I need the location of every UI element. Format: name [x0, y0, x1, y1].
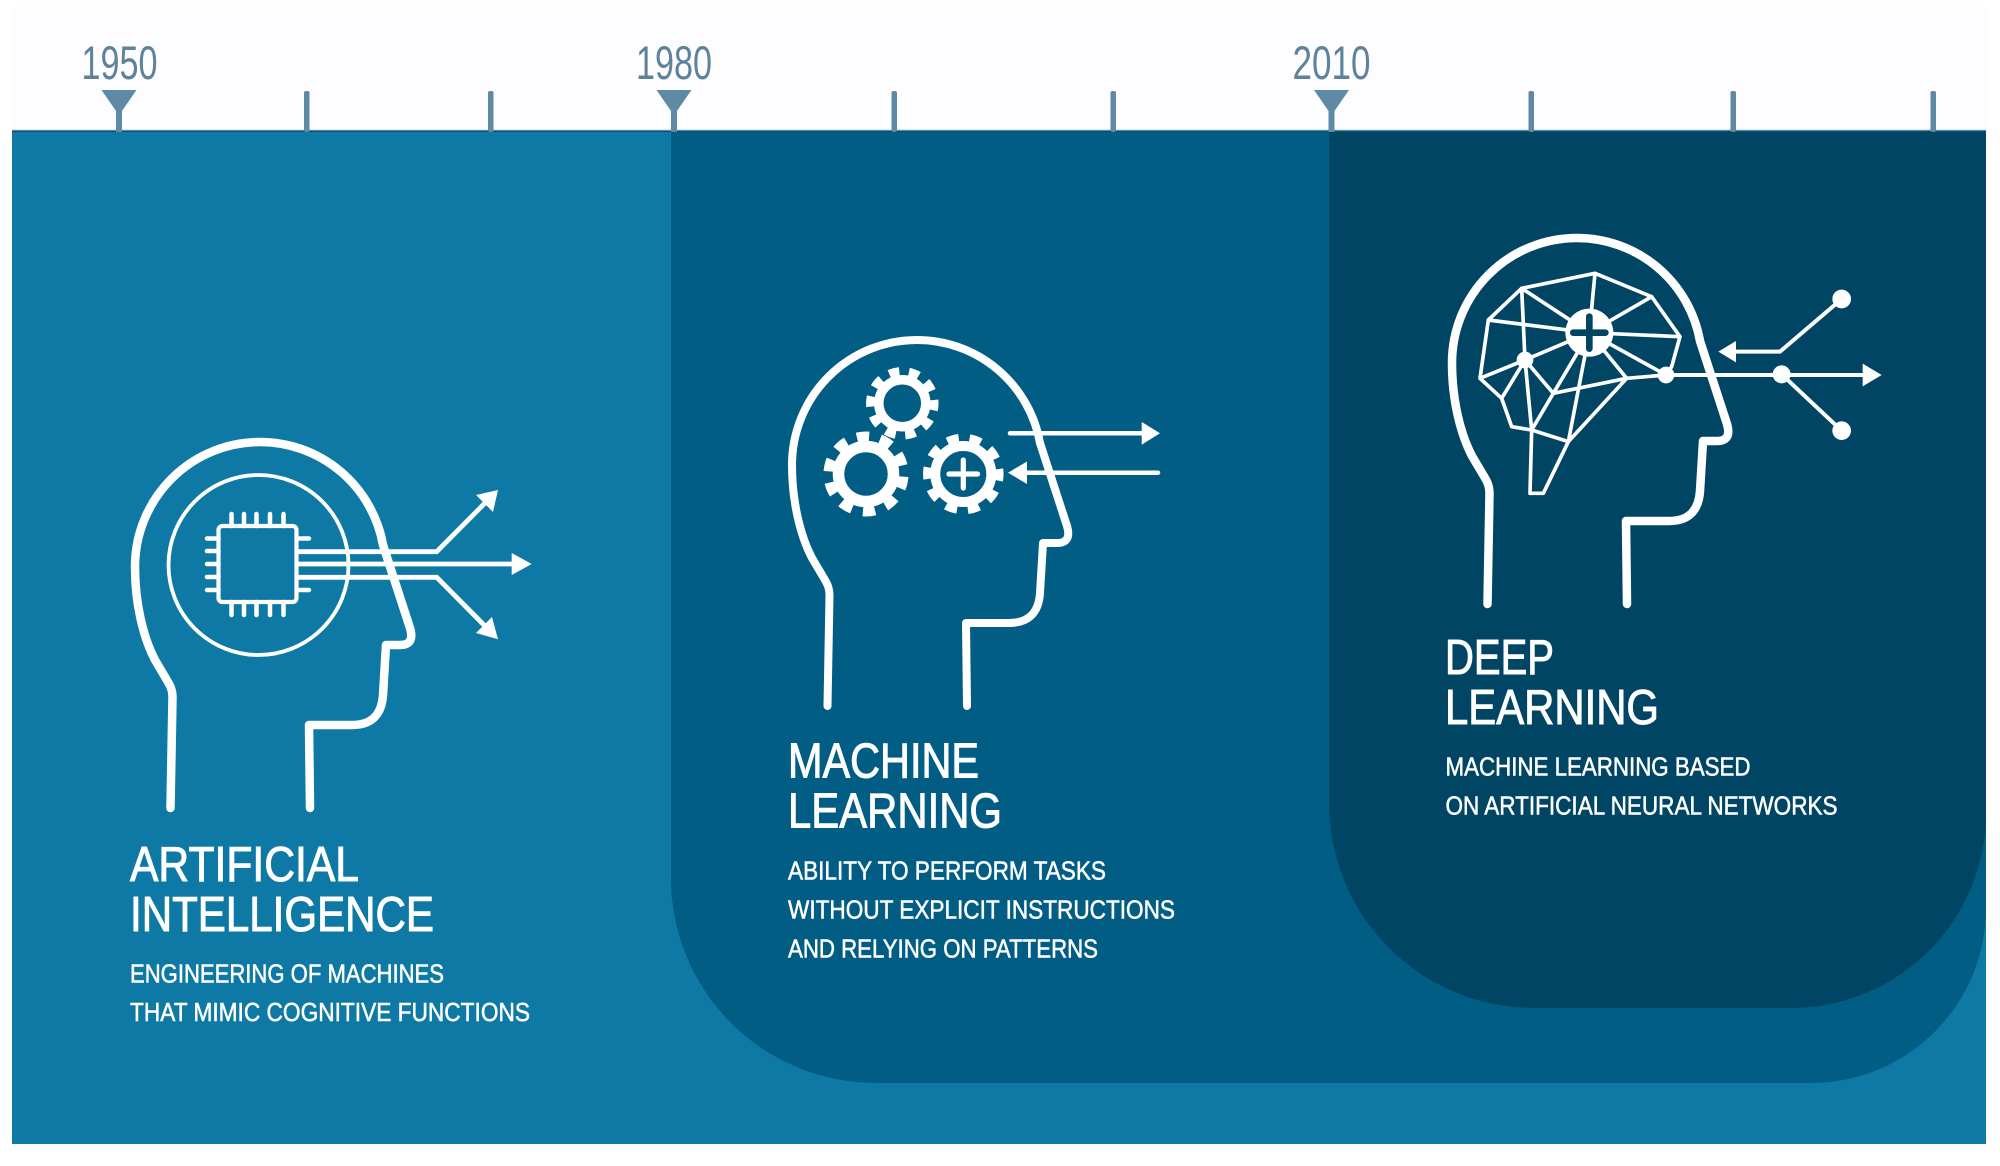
- text: deep learning description: ON ARTIFICIAL NEURAL NETWORKS: [1446, 790, 1838, 820]
- panel: machine learning background: [671, 130, 1986, 1083]
- text: machine learning description: WITHOUT EXPLICIT INSTRUCTIONS: [788, 894, 1175, 924]
- heading: artificial intelligence: ARTIFICIAL: [130, 838, 359, 892]
- heading: artificial intelligence: INTELLIGENCE: [130, 888, 434, 942]
- heading: artificial intelligence: [130, 838, 434, 942]
- year marker 1950: [82, 36, 158, 132]
- input and output arrows: [1008, 422, 1160, 484]
- timeline: [82, 36, 1936, 132]
- heading: machine learning: LEARNING: [788, 784, 1002, 838]
- text: machine learning description: [788, 856, 1175, 964]
- neural network brain: [1480, 273, 1680, 493]
- heading: deep learning: [1445, 631, 1659, 735]
- head outline: [135, 442, 411, 808]
- text: deep learning description: [1446, 752, 1838, 820]
- text: artificial intelligence description: ENGINEERING OF MACHINES: [130, 958, 444, 988]
- gear top: [868, 369, 937, 438]
- year marker 1980: 1980: [636, 36, 712, 89]
- timeline minor ticks: [304, 91, 1936, 132]
- panel: deep learning background: [1329, 130, 1986, 1008]
- year marker 1950: 1950: [82, 36, 158, 89]
- ring around chip: [168, 475, 348, 655]
- icon: artificial intelligence head with chip: [135, 442, 532, 808]
- text: machine learning description: ABILITY TO PERFORM TASKS: [788, 856, 1106, 886]
- heading: machine learning: MACHINE: [788, 734, 979, 788]
- year marker 1980: [636, 36, 712, 132]
- text: artificial intelligence description: [130, 958, 530, 1027]
- chip: [207, 514, 309, 615]
- heading: deep learning: DEEP: [1445, 631, 1554, 685]
- text: deep learning description: MACHINE LEARNING BASED: [1446, 752, 1750, 782]
- year marker 2010: [1292, 36, 1370, 132]
- text: machine learning description: AND RELYING ON PATTERNS: [788, 934, 1098, 964]
- gear left: [827, 435, 905, 513]
- three output arrows: [297, 490, 532, 639]
- year marker 2010: 2010: [1292, 36, 1370, 89]
- head outline: [1452, 238, 1728, 604]
- text: artificial intelligence description: THAT MIMIC COGNITIVE FUNCTIONS: [130, 997, 530, 1027]
- heading: machine learning: [788, 734, 1002, 838]
- heading: deep learning: LEARNING: [1445, 681, 1659, 735]
- icon: deep learning head with neural brain: [1452, 238, 1882, 604]
- icon: machine learning head with gears: [792, 340, 1160, 706]
- gear right with plus: [923, 433, 1004, 515]
- head outline: [792, 340, 1068, 706]
- branching arrows with nodes: [1666, 290, 1882, 440]
